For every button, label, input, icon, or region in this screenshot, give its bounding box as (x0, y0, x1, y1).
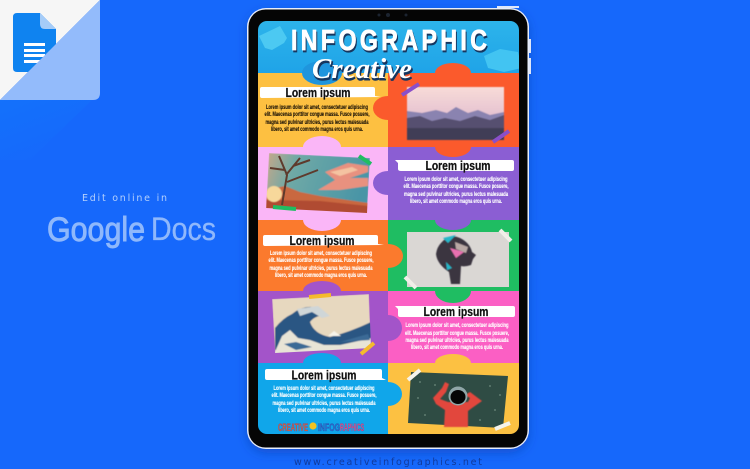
text block: row 2 (395, 159, 514, 205)
panel: row 1 image, red-orange (373, 63, 519, 147)
text block: row 2: libero, sit amet commodo magna eros quis urna. (410, 199, 502, 205)
panel: row 3 image, green (388, 220, 519, 291)
text block: row 1: Lorem ipsum dolor sit amet, consectetuer adipiscing (266, 105, 368, 111)
panel: row 1 text, yellow (258, 61, 388, 147)
panel: row 2 image, pink (258, 136, 388, 220)
text block: row 3: libero, sit amet commodo magna eros quis urna. (275, 273, 367, 279)
text block: row 3: Lorem ipsum dolor sit amet, consectetuer adipiscing (270, 251, 372, 257)
infographic screen (258, 21, 522, 434)
title: INFOGRAPHIC: INFOGRAPHIC (292, 25, 488, 59)
website url: www.creativeinfographics.net (294, 457, 482, 468)
logo: Creative Infographics: INFOG (318, 422, 340, 434)
panel: row 4 text, hot pink (388, 291, 519, 363)
text block: row 3: magna sed pulvinar ultricies, purus lectus malesuada (270, 266, 373, 272)
caption: edit online in: Edit online in (82, 193, 167, 204)
text block: row 2: Lorem ipsum dolor sit amet, consectetuer adipiscing (404, 177, 508, 183)
text block: row 5: elit. Maecenas porttitor congue massa. Fusce posuere, (272, 393, 377, 399)
text block: row 3 (263, 234, 384, 279)
icon: Google Docs document (13, 13, 56, 72)
text block: row 2: magna sed pulvinar ultricies, purus lectus malesuada (404, 192, 508, 198)
panel: row 5 text, sky blue (258, 353, 388, 434)
tablet device (247, 6, 531, 449)
text block: row 5 (265, 368, 386, 414)
panel: row 4 image, purple (258, 281, 388, 363)
folded sheet corner with Docs icon (0, 0, 100, 160)
infographic screen: RAPHICS (340, 422, 364, 434)
image: mountain landscape (402, 84, 509, 142)
text block: row 3: elit. Maecenas porttitor congue massa. Fusce posuere, (268, 258, 374, 264)
text block: row 5: magna sed pulvinar ultricies, purus lectus malesuada (272, 401, 376, 407)
subtitle: Creative: Creative (312, 54, 412, 85)
title: INFOGRAPHIC: INFOGRAPHIC (291, 23, 487, 57)
text block: row 1: magna sed pulvinar ultricies, purus lectus malesuada (266, 120, 369, 126)
infographic page (0, 0, 533, 467)
logo text: Google Docs (47, 211, 216, 249)
text block: row 1: Lorem ipsum (286, 86, 350, 100)
text block: row 4: Lorem ipsum dolor sit amet, consectetuer adipiscing (406, 323, 509, 329)
text block: row 4 (395, 305, 515, 351)
image: abstract head portrait (405, 230, 511, 288)
header band (258, 21, 522, 74)
image: great wave (272, 294, 374, 355)
logo text: Google Docs: Docs (151, 211, 216, 247)
text block: row 5: libero, sit amet commodo magna eros quis urna. (278, 408, 370, 414)
text block: row 1 (260, 86, 381, 133)
panel: row 5 image, yellow (374, 354, 519, 434)
text block: row 2: elit. Maecenas porttitor congue massa. Fusce posuere, (404, 184, 509, 190)
logo: Creative Infographics: CREATIVE (278, 422, 308, 434)
text block: row 3: Lorem ipsum (290, 234, 354, 248)
image: tree at sunset (266, 153, 371, 214)
text block: row 4: elit. Maecenas porttitor congue massa. Fusce posuere, (405, 331, 509, 337)
text block: row 4: Lorem ipsum (424, 305, 488, 319)
text block: row 4: magna sed pulvinar ultricies, purus lectus malesuada (406, 338, 509, 344)
text block: row 5: Lorem ipsum (292, 368, 356, 382)
image: astronaut on grass (408, 370, 510, 429)
text block: row 5: Lorem ipsum dolor sit amet, consectetuer adipiscing (274, 386, 375, 392)
text block: row 1: libero, sit amet commodo magna eros quis urna. (271, 127, 363, 133)
logo: Creative Infographics (278, 422, 364, 432)
text block: row 2: Lorem ipsum (426, 159, 490, 173)
logo text: Google Docs: Google (47, 211, 145, 249)
text block: row 4: libero, sit amet commodo magna eros quis urna. (411, 345, 503, 351)
subtitle: Creative: Creative (313, 56, 413, 87)
text block: row 1: elit. Maecenas porttitor congue massa. Fusce posuere, (264, 112, 370, 118)
panel: row 2 text, violet (373, 147, 519, 220)
panel: row 3 text, orange (258, 220, 388, 291)
